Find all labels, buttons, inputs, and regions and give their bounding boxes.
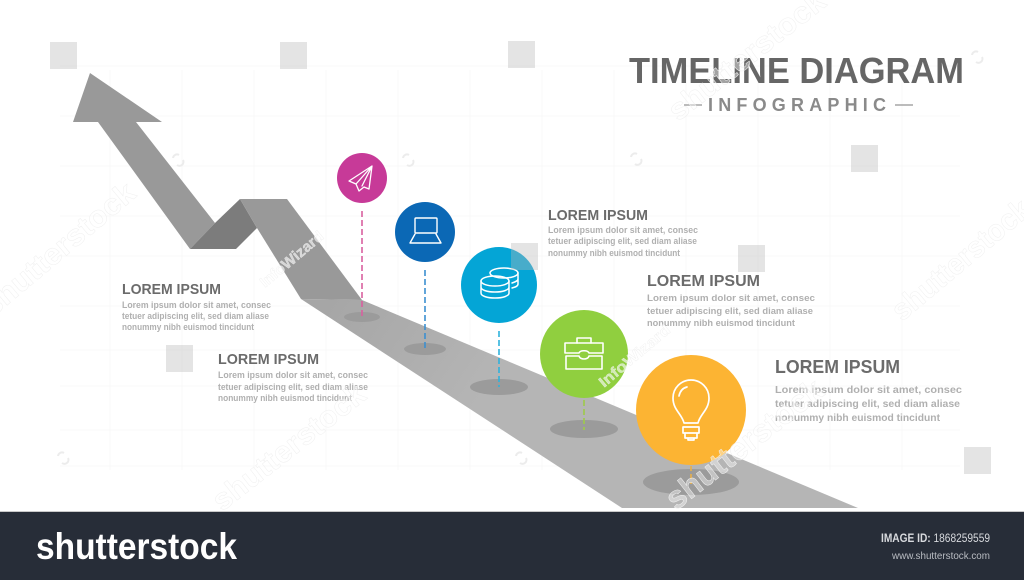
footer logo: shutterstock	[36, 526, 237, 567]
watermark text: InfoWizard	[596, 321, 674, 391]
text block: lorem ipsum 2: tetuer adipiscing elit, sed diam aliase	[647, 306, 813, 317]
watermark squares	[50, 41, 991, 474]
text block: lorem ipsum 5: LOREM IPSUM	[218, 351, 319, 368]
milestone 5: light bulb	[636, 355, 746, 495]
milestone 1: paper plane	[337, 153, 387, 322]
text block: lorem ipsum 4: LOREM IPSUM	[122, 281, 221, 298]
text block: lorem ipsum 1: Lorem ipsum dolor sit amet, consec	[548, 225, 698, 235]
text block: lorem ipsum 2: Lorem ipsum dolor sit amet, consec	[647, 293, 815, 304]
text block: lorem ipsum 3	[775, 357, 962, 424]
arrow fold	[190, 199, 257, 249]
road	[301, 299, 858, 508]
footer image id: IMAGE ID: 1868259559	[881, 533, 990, 545]
text block: lorem ipsum 3: nonummy nibh euismod tincidunt	[775, 412, 940, 424]
icon: paper plane	[349, 166, 372, 191]
text block: lorem ipsum 5: nonummy nibh euismod tincidunt	[218, 393, 352, 403]
text block: lorem ipsum 5: Lorem ipsum dolor sit amet, consec	[218, 370, 368, 380]
text block: lorem ipsum 3: Lorem ipsum dolor sit amet, consec	[775, 384, 962, 396]
text block: lorem ipsum 5	[218, 351, 368, 403]
arrow	[73, 73, 362, 300]
text block: lorem ipsum 1: tetuer adipiscing elit, sed diam aliase	[548, 236, 697, 246]
arrow second segment	[240, 199, 362, 300]
text block: lorem ipsum 4: tetuer adipiscing elit, sed diam aliase	[122, 311, 269, 321]
text block: lorem ipsum 1	[548, 207, 698, 258]
text block: lorem ipsum 1: nonummy nibh euismod tincidunt	[548, 248, 680, 258]
milestone 4: briefcase	[540, 310, 628, 438]
icon: light bulb	[673, 380, 709, 440]
text block: lorem ipsum 1: LOREM IPSUM	[548, 207, 648, 224]
watermark text: shutterstock	[206, 377, 372, 518]
watermark text: InfoWizard	[257, 228, 327, 291]
title: INFOGRAPHIC	[708, 95, 886, 115]
text block: lorem ipsum 5: tetuer adipiscing elit, sed diam aliase	[218, 382, 368, 392]
text block: lorem ipsum 2: LOREM IPSUM	[647, 273, 760, 290]
arrow head and first segment	[73, 73, 215, 249]
watermark text: shutterstock	[658, 371, 830, 517]
milestone 3: coins	[461, 247, 537, 395]
milestone 2: laptop	[395, 202, 455, 355]
text block: lorem ipsum 4: Lorem ipsum dolor sit amet, consec	[122, 300, 271, 310]
text block: lorem ipsum 4: nonummy nibh euismod tincidunt	[122, 322, 254, 332]
icon: briefcase	[565, 338, 603, 369]
footer url: www.shutterstock.com	[891, 550, 990, 562]
text block: lorem ipsum 3: LOREM IPSUM	[775, 357, 900, 377]
text block: lorem ipsum 2: nonummy nibh euismod tincidunt	[647, 318, 796, 329]
icon: laptop	[410, 218, 441, 243]
icon: coins	[481, 268, 518, 298]
title: TIMELINE DIAGRAM	[629, 50, 964, 91]
footer bar	[0, 511, 1024, 580]
text block: lorem ipsum 2	[647, 273, 815, 329]
title	[629, 50, 964, 115]
text block: lorem ipsum 4	[122, 281, 271, 332]
text block: lorem ipsum 3: tetuer adipiscing elit, sed diam aliase	[775, 398, 960, 410]
